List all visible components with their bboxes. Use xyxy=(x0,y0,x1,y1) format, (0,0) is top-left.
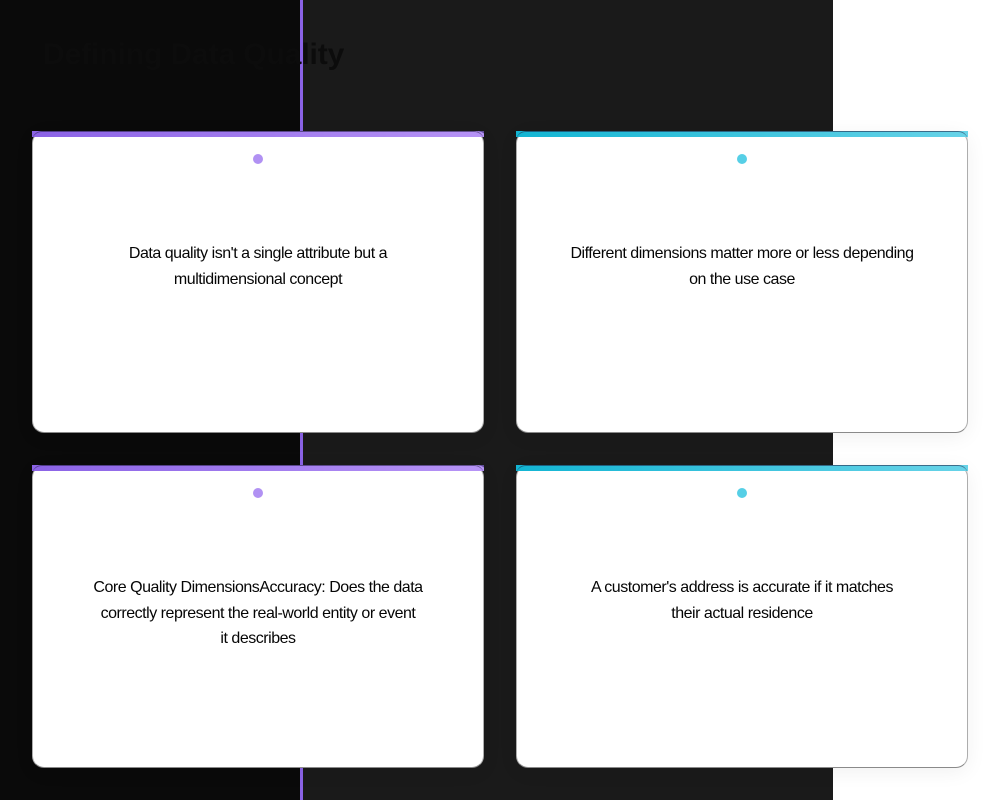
vertical purple timeline line xyxy=(300,0,303,800)
panel: dimensions by use case xyxy=(516,131,968,433)
dot marker xyxy=(737,154,747,164)
card text: multidimensional concept xyxy=(174,270,342,288)
card text: correctly represent the real-world entity or event xyxy=(101,604,415,622)
card text xyxy=(129,245,388,288)
card text: on the use case xyxy=(689,270,795,288)
card text xyxy=(93,579,424,647)
card text xyxy=(591,579,893,622)
card text: their actual residence xyxy=(671,604,813,622)
panel: address example xyxy=(516,465,968,768)
title: Defining Data Quality xyxy=(43,38,344,71)
card text xyxy=(570,245,914,288)
dot marker xyxy=(253,488,263,498)
card text: Data quality isn't a single attribute but a xyxy=(129,245,387,262)
dot marker xyxy=(737,488,747,498)
card text: A customer's address is accurate if it matches xyxy=(591,579,893,596)
card text: it describes xyxy=(220,630,296,647)
accent bar xyxy=(516,465,968,471)
background: dark left column xyxy=(0,0,300,800)
accent bar xyxy=(32,465,484,471)
panel: core quality dimensions xyxy=(32,465,484,768)
accent bar xyxy=(516,131,968,137)
card text: Core Quality DimensionsAccuracy: Does the data xyxy=(93,579,423,596)
dot marker xyxy=(253,154,263,164)
background: dark main area xyxy=(303,0,833,800)
accent bar xyxy=(32,131,484,137)
panel: data quality concept xyxy=(32,131,484,433)
card text: Different dimensions matter more or less depending xyxy=(570,245,914,262)
